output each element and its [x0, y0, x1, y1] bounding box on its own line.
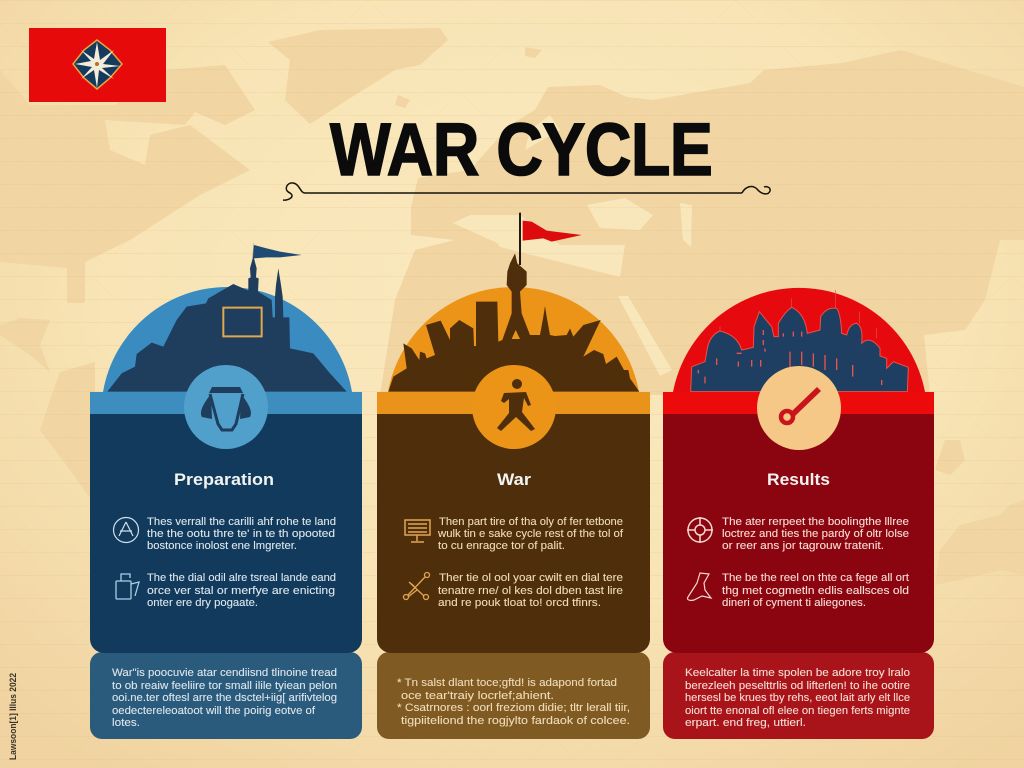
note text: hersesl be krues tby rehs, eeot lait arly elt llce: [685, 692, 910, 704]
text block: tenatre rne/ ol kes dol dben tast lire: [438, 585, 623, 597]
text block: [437, 516, 623, 552]
text block: bostonce inolost ene lmgreter.: [147, 540, 297, 552]
note text: ooi.ne.ter oftesl arre the dsctel+iig[ arifivtelog: [112, 692, 337, 704]
panel: results: [663, 288, 934, 739]
panel body: [663, 414, 934, 653]
icon: network nodes: [404, 572, 430, 600]
text block: [438, 572, 623, 609]
icon: compass: [114, 518, 138, 542]
text block: [147, 572, 336, 609]
note text: berezleeh peselttrlis od lifterlen! to ihe ootire: [685, 680, 910, 692]
note text: oedectereleoatoot will the poirig eotve of: [112, 705, 315, 717]
lower note box: [377, 652, 650, 739]
note text: oiort tte enonal ofl elee on tiegen ferts mignte: [685, 705, 910, 717]
text block: orce ver stal or merfye are enicting: [147, 585, 335, 597]
panel: preparation: [90, 242, 362, 739]
note text: tigpiiteliond the rogjylto fardaok of colcee.: [401, 715, 630, 727]
heading: War: [497, 470, 531, 489]
band: [90, 392, 362, 414]
icon: mug: [116, 574, 139, 599]
palace skyline silhouette: [691, 290, 908, 392]
icon: wheel: [687, 517, 713, 543]
lower note box: [90, 652, 362, 739]
text block: the the ootu thre te' in te th opooted: [147, 528, 335, 540]
note text: [397, 677, 630, 727]
small vertical credit: Lawsoon[1] Illus 2022: [8, 673, 19, 760]
text block: wulk tin e sake cycle rest of the tol of: [437, 528, 623, 540]
dome: [388, 287, 639, 392]
text block: Thes verrall the carilli ahf rohe te land: [147, 516, 336, 528]
panel body: [90, 414, 362, 653]
title: WAR CYCLE: [330, 108, 713, 191]
text block: The be the reel on thte ca fege all ort: [722, 572, 909, 584]
note text: to ob reaiw feeliire tor small ilile tyiean pelon: [112, 680, 337, 692]
note text: oce tear'traiy locrlef;ahient.: [401, 690, 554, 702]
band: [377, 392, 650, 414]
heading: Results: [767, 470, 830, 489]
text block: thg met cogmetln edlis eallsces old: [722, 585, 909, 597]
lower note box: [663, 652, 934, 739]
panel body: [377, 414, 650, 653]
dome: [673, 288, 925, 392]
castle mountain silhouette: [107, 242, 347, 392]
note text: War"is poocuvie atar cendiisnd tlinoine tread: [112, 667, 337, 679]
note text: lotes.: [112, 717, 140, 729]
text block: Ther tie ol ool yoar cwilt en dial tere: [439, 572, 623, 584]
dome: [103, 287, 352, 392]
text block: [722, 516, 909, 552]
note text: [685, 667, 910, 729]
note text: erpart. end freg, uttierl.: [685, 717, 806, 729]
text block: The ater rerpeet the boolingthe lllree: [722, 516, 909, 528]
title underline with flourishes: [283, 183, 770, 200]
text block: Then part tire of tha oly of fer tetbone: [439, 516, 623, 528]
note text: * Tn salst dlant toce;gftd! is adapond fortad: [397, 677, 617, 689]
text block: or reer ans jor tagrouw tratenit.: [722, 540, 884, 552]
note text: [112, 667, 337, 729]
icon: key: [757, 366, 841, 450]
city skyline silhouette: [388, 213, 639, 392]
text block: and re pouk tloat to! orcd tfinrs.: [438, 597, 601, 609]
text block: loctrez and ties the pardy of oltr lolse: [722, 528, 909, 540]
text block: [722, 572, 909, 609]
note text: Keelcalter la time spolen be adore troy lralo: [685, 667, 910, 679]
text block: dineri of cyment ti aliegones.: [722, 597, 866, 609]
icon: backpack: [184, 365, 268, 449]
text block: [147, 516, 336, 552]
text block: to cu enragce tor of palit.: [438, 540, 565, 552]
panel: war: [377, 213, 650, 739]
icon: bird outline: [687, 573, 711, 600]
text block: The the dial odil alre tsreal lande eand: [147, 572, 336, 584]
icon: monitor: [405, 520, 430, 542]
heading: Preparation: [174, 470, 274, 489]
note text: * Csatrnores : oorl freziom didie; tltr lerall tiir,: [397, 702, 630, 714]
band: [663, 392, 934, 414]
text block: onter ere dry pogaate.: [147, 597, 258, 609]
icon: walking figure: [472, 365, 556, 449]
flag emblem top left: [29, 28, 166, 102]
